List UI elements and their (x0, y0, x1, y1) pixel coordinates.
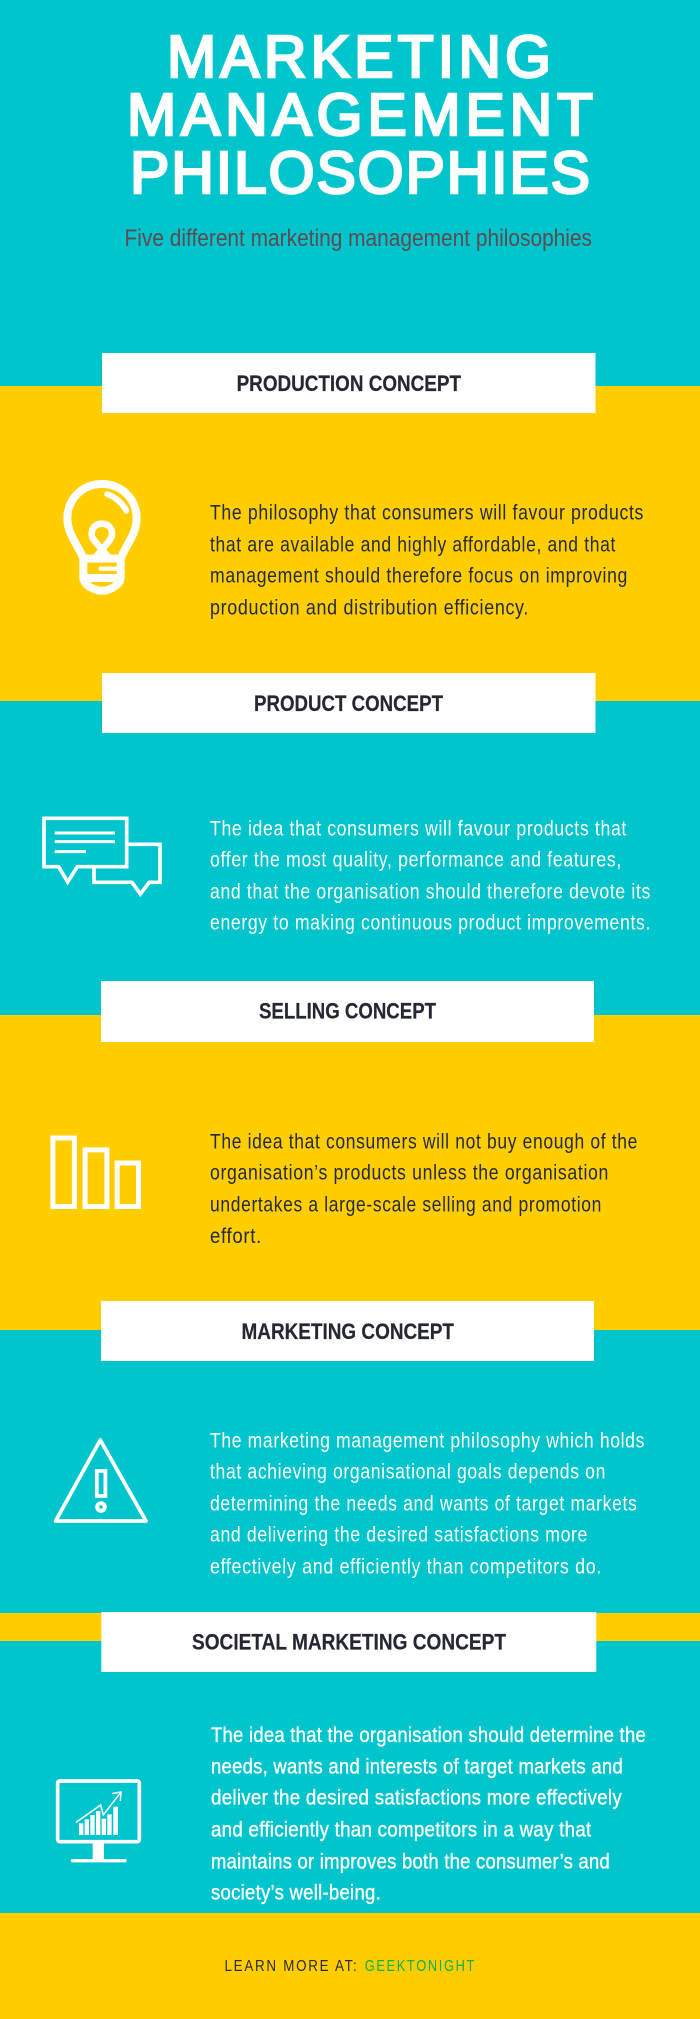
title: MARKETING (167, 24, 551, 90)
heading: product concept: PRODUCT CONCEPT (254, 691, 443, 716)
text: societal marketing concept description: deliver the desired satisfactions more effectively (211, 1786, 622, 1810)
text: societal marketing concept description: maintains or improves both the consumer’s and (211, 1850, 610, 1874)
heading: societal marketing concept: SOCIETAL MARKETING CONCEPT (192, 1630, 506, 1654)
text: marketing concept description: and delivering the desired satisfactions more (210, 1523, 588, 1547)
subtitle: Five different marketing management philosophies (124, 225, 592, 252)
text: production concept description: that are available and highly affordable, and that (210, 532, 616, 556)
title: MANAGEMENT (127, 82, 593, 148)
text: societal marketing concept description: and efficiently than competitors in a way that (211, 1818, 592, 1842)
text: marketing concept description: effectively and efficiently than competitors do. (210, 1554, 602, 1578)
heading: marketing concept (101, 1301, 594, 1361)
title (127, 24, 593, 206)
icon: chat bubbles (44, 818, 160, 894)
text: selling concept description (210, 1129, 638, 1248)
icon: warning triangle (56, 1440, 146, 1521)
panel: marketing concept (0, 1301, 700, 1613)
text: societal marketing concept description (211, 1723, 646, 1905)
heading: societal marketing concept (101, 1612, 596, 1672)
text: selling concept description: undertakes a large-scale selling and promotion (210, 1192, 602, 1216)
icon: light bulb (67, 484, 137, 591)
text: production concept description (210, 501, 644, 619)
heading: product concept (102, 673, 596, 733)
panel: product concept (0, 673, 700, 1015)
text: marketing concept description (210, 1428, 645, 1578)
panel: societal marketing concept (0, 1612, 700, 1913)
panel: production concept (0, 353, 700, 701)
panel: selling concept (0, 981, 700, 1330)
icon: monitor with growth chart (58, 1781, 139, 1862)
heading: selling concept: SELLING CONCEPT (259, 998, 436, 1024)
text: product concept description (210, 816, 651, 934)
text: product concept description: offer the most quality, performance and features, (210, 847, 622, 871)
footer text: LEARN MORE AT: (224, 1958, 358, 1975)
title: PHILOSOPHIES (130, 140, 590, 206)
text: societal marketing concept description: needs, wants and interests of target markets and (211, 1755, 623, 1779)
panel: footer (0, 1913, 700, 2019)
heading: selling concept (101, 981, 594, 1042)
text: selling concept description: effort. (210, 1224, 262, 1248)
text: societal marketing concept description: society’s well-being. (211, 1881, 381, 1905)
icon: bar outlines (53, 1138, 138, 1206)
footer text: GEEKTONIGHT (365, 1958, 476, 1975)
footer text (224, 1958, 476, 1975)
text: production concept description: production and distribution efficiency. (210, 595, 529, 619)
text: marketing concept description: that achieving organisational goals depends on (210, 1459, 606, 1483)
heading: marketing concept: MARKETING CONCEPT (242, 1319, 454, 1344)
heading: production concept: PRODUCTION CONCEPT (237, 371, 461, 396)
heading: production concept (102, 353, 596, 413)
panel: title header (0, 0, 700, 386)
text: selling concept description: organisation’s products unless the organisation (210, 1160, 609, 1184)
